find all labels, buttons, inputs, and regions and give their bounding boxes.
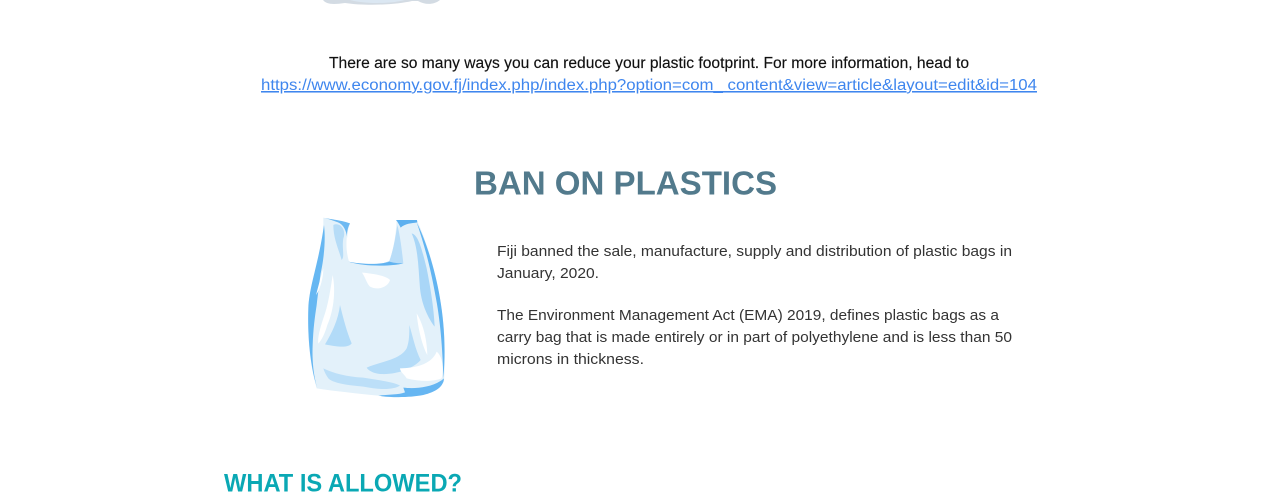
text block: ban description: carry bag that is made entirely or in part of polyethylene and is less than 50 <box>497 329 1012 346</box>
heading: ban on plastics: BAN ON PLASTICS <box>474 166 777 202</box>
text block: ban description: microns in thickness. <box>497 351 644 368</box>
icon: plastic bag <box>308 218 445 397</box>
text block: ban description: The Environment Management Act (EMA) 2019, defines plastic bags as a <box>497 307 1000 324</box>
icon: cropped plastic waste at top <box>323 0 440 5</box>
text block: ban description: Fiji banned the sale, manufacture, supply and distribution of plastic bags in <box>497 243 1012 260</box>
text block: footprint message <box>261 55 1037 94</box>
link: economy.gov.fj: https://www.economy.gov.fj/index.php/index.php?option=com_ content&view=article&layout=edit&id=104 <box>261 77 1037 94</box>
text block: footprint message: There are so many ways you can reduce your plastic footprint. For more information, head to <box>329 55 969 72</box>
text block: ban description <box>497 243 1012 368</box>
heading: what is allowed: WHAT IS ALLOWED? <box>224 470 462 498</box>
text block: ban description: January, 2020. <box>497 265 599 282</box>
